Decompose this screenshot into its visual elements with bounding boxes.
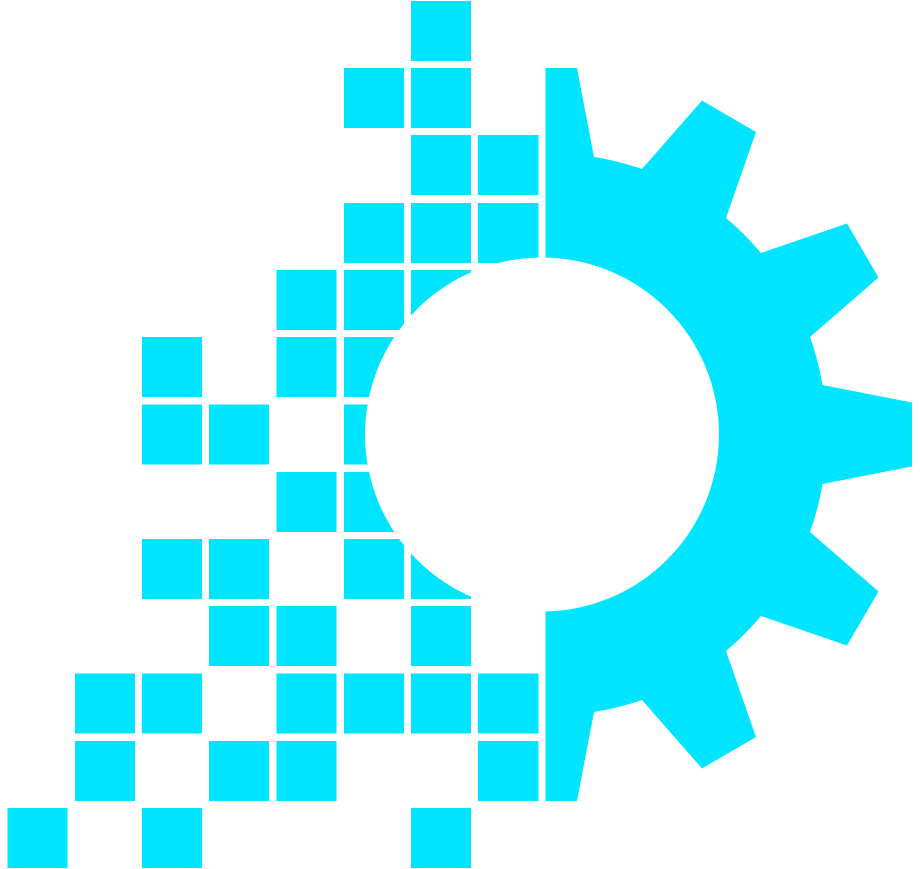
- pixel squares dissolving from the gear: [8, 1, 538, 868]
- central circular hole: [365, 258, 719, 612]
- half gear with teeth: [546, 68, 912, 801]
